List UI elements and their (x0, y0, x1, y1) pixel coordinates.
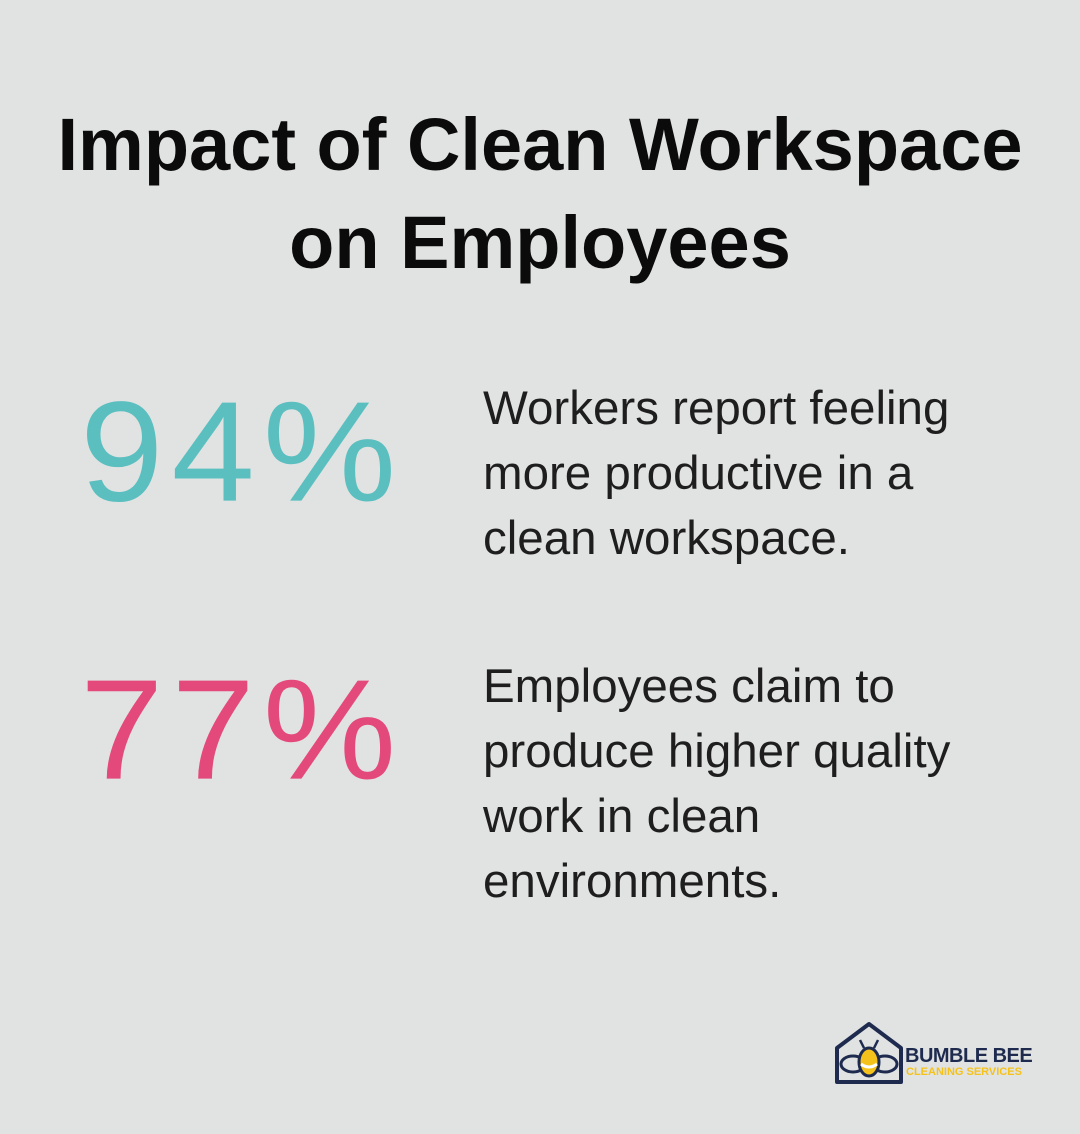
logo (835, 1022, 1032, 1084)
title: Impact of Clean Workspace (57, 103, 1023, 186)
text: 77% description (483, 660, 950, 908)
text: 94% description: Workers report feeling (483, 382, 949, 435)
text: 77% description: environments. (483, 855, 781, 908)
title (57, 103, 1023, 284)
logo text: BUMBLE BEE (905, 1045, 1032, 1067)
logo: CLEANING SERVICES (906, 1066, 1022, 1078)
text: 77% description: Employees claim to (483, 660, 895, 713)
text: 94% description: more productive in a (483, 447, 913, 500)
title: on Employees (289, 201, 791, 284)
text: 77% description: work in clean (483, 790, 760, 843)
stat: 77%: 77% (80, 649, 404, 809)
stat: 94%: 94% (80, 371, 404, 531)
text: 94% description (483, 382, 949, 565)
icon: bee house (835, 1022, 903, 1084)
text: 77% description: produce higher quality (483, 725, 950, 778)
text: 94% description: clean workspace. (483, 512, 850, 565)
